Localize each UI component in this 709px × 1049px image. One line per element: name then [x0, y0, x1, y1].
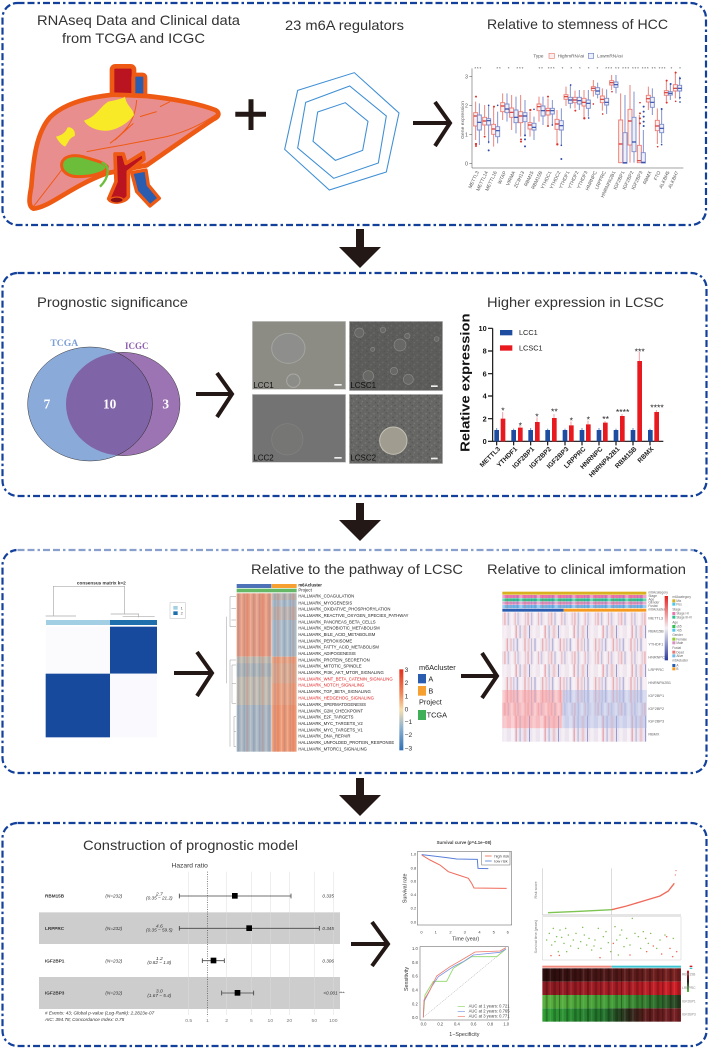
chart: survival curve: 0.4	[411, 892, 417, 897]
pathway labels: Project	[298, 587, 313, 592]
gene labels: ZC3H13	[513, 170, 526, 189]
heatmap: risk genes: IGF2BP1	[682, 999, 696, 1003]
gene labels: HNRNPC	[585, 170, 599, 192]
image: LCSC1	[349, 321, 443, 391]
chart: ROC curve: AUC at 3 years: 0.771	[469, 1014, 510, 1019]
gene labels: METTL14	[475, 170, 490, 192]
pathway labels: HALLMARK_WNT_BETA_CATENIN_SIGNALING	[298, 676, 393, 681]
image: LCSC2	[349, 394, 443, 464]
chart: gene expression boxplot: 1	[465, 132, 468, 138]
legend: Dead	[676, 650, 684, 654]
chart: ROC curve: 0.4	[454, 1021, 460, 1026]
chart: forest plot: IGF2BP1	[45, 958, 65, 963]
legend	[665, 595, 693, 671]
legend: Type	[533, 54, 544, 59]
chart: relative expression bars: 6	[483, 369, 487, 378]
image: LCC1	[252, 321, 346, 390]
rows	[179, 894, 319, 995]
legend: 2	[181, 611, 184, 616]
chart: forest plot: 0.345	[322, 926, 334, 931]
chart: consensus matrix	[46, 581, 185, 737]
gene labels	[468, 170, 681, 199]
legend: clusters: m6Acluster	[419, 663, 456, 672]
red boxes	[474, 72, 677, 163]
blue boxes	[477, 75, 682, 163]
heading: pathway: Relative to the pathway of LCSC	[251, 561, 463, 577]
colour scale	[399, 667, 413, 752]
pathway labels: HALLMARK_E2F_TARGETS	[298, 715, 354, 720]
heading: clinical: Relative to clinical imformation	[487, 561, 686, 577]
panel: prognostic model	[2, 823, 706, 1046]
chart: relative expression bars: *	[587, 414, 591, 424]
chart: gene expression boxplot: 3	[465, 75, 468, 81]
gene labels: HNRNPA2B1	[600, 170, 618, 199]
gene labels: METTL16	[484, 170, 499, 192]
chart: survival curve: 2	[449, 929, 452, 934]
legend: Stage	[672, 608, 681, 612]
legend: 1	[181, 605, 184, 610]
pathway labels: HALLMARK_SPERMATOGENESIS	[298, 702, 366, 707]
venn diagram: ICGC	[125, 341, 148, 351]
gene labels: m6Acategory	[648, 591, 668, 595]
chart: relative expression bars: ***	[635, 346, 645, 356]
icon: nested hexagons	[285, 73, 399, 190]
pathway labels: HALLMARK_XENOBIOTIC_METABOLISM	[298, 626, 380, 631]
legend: A	[676, 664, 679, 668]
gene labels: RBM15	[523, 170, 536, 187]
chart: forest plot: # Events: 43; Global p-value (Log-Rank): 2.2823e-07	[45, 1010, 155, 1015]
chart: forest plot: (N=232)	[105, 926, 123, 931]
legend: Gender	[672, 633, 683, 637]
chart: survival curve: 3	[464, 929, 467, 934]
chart: ROC curve: 0.0	[412, 1015, 418, 1020]
chart: relative expression bars: IGF2BP3	[546, 446, 571, 470]
legend: >65	[676, 628, 682, 632]
heatmap: risk genes: LRPPRC	[682, 986, 696, 990]
panel: LCSC pathways	[2, 548, 706, 773]
gene labels: ALKBH7	[667, 170, 681, 190]
chart: survival curve: Survival rate	[403, 873, 409, 903]
chart: ROC curve: 1.0	[503, 1021, 510, 1026]
heading: RNAseq data: RNAseq Data and Clinical data	[37, 12, 240, 28]
chart: consensus matrix: consensus matrix k=2	[77, 581, 126, 586]
pathway labels: m6Acluster	[298, 583, 322, 588]
heatmap: risk genes: IGF2BP3	[682, 1013, 696, 1017]
chart: relative expression bars: **	[551, 407, 558, 417]
chart: ROC curve: 0.2	[437, 1021, 444, 1026]
chart: forest plot: (0.35 − 59.5)	[146, 928, 173, 933]
gene labels: WTAP	[497, 170, 508, 185]
arrow: to survival plots	[351, 922, 388, 966]
chart: forest plot: 0.335	[322, 894, 334, 899]
gene labels: IGF2BP2	[648, 707, 664, 711]
heading: model: Construction of prognostic model	[83, 837, 298, 853]
chart: relative expression bars: *	[535, 411, 539, 421]
pathway labels: HALLMARK_MYC_TARGETS_V2	[298, 721, 363, 726]
chart: survival curve: 1.0	[411, 851, 417, 856]
pathway labels: HALLMARK_COAGULATION	[298, 594, 354, 599]
outliers	[475, 72, 677, 147]
arrow: down 1	[339, 229, 381, 268]
legend: HighmRNAsi	[558, 54, 584, 59]
venn diagram	[28, 338, 180, 461]
chart: relative expression bars: *	[570, 416, 574, 426]
chart: survival status scatter	[534, 917, 681, 960]
pathway labels: HALLMARK_HEDGEHOG_SIGNALING	[298, 695, 374, 700]
chart: forest plot: (1.67 − 5.4)	[147, 993, 172, 998]
chart: forest plot: 100	[329, 1018, 338, 1024]
chart: forest plot: IGF2BP3	[45, 991, 65, 996]
legend: clusters: A	[428, 675, 433, 684]
pathway labels: HALLMARK_PROTEIN_SECRETION	[298, 658, 370, 663]
image: LCSC2: LCSC2	[350, 454, 377, 463]
pathway labels: HALLMARK_PI3K_AKT_MTOR_SIGNALING	[298, 670, 384, 675]
pathway labels: HALLMARK_ADIPOGENESIS	[298, 651, 356, 656]
chart: forest plot: (N=232)	[105, 991, 123, 996]
chart: relative expression bars: LRPPRC	[563, 446, 588, 470]
legend: m6Acluster	[672, 659, 688, 663]
legend: LowmRNAsi	[597, 54, 623, 59]
chart: relative expression bars: *	[519, 420, 523, 430]
chart: survival curve: 0.0	[411, 919, 417, 924]
chart: forest plot: (N=232)	[105, 894, 123, 899]
pathway labels: HALLMARK_PANCREAS_BETA_CELLS	[298, 619, 376, 624]
chart: survival curve: 0	[420, 929, 423, 934]
gene labels: Gender	[648, 601, 660, 605]
chart: risk score distribution	[534, 868, 681, 915]
arrow: to pathway heatmap	[174, 652, 212, 696]
chart: ROC curve: 0.0	[421, 1021, 427, 1026]
legend: clusters: B	[428, 686, 433, 695]
legend: ≤65	[676, 625, 682, 629]
pathway labels: HALLMARK_MYOGENESIS	[298, 600, 352, 605]
chart: ROC curve: 1.0	[412, 946, 418, 951]
chart: ROC curve: AUC at 2 years: 0.765	[469, 1009, 510, 1014]
legend: clusters: Project	[419, 697, 442, 706]
chart: survival curve: 0.6	[411, 878, 417, 883]
chart: forest plot: 3.0	[156, 988, 163, 994]
pathway labels: HALLMARK_PEROXISOME	[298, 638, 352, 643]
gene labels: YTHDF3	[576, 170, 590, 190]
pathway labels: HALLMARK_BILE_ACID_METABOLISM	[298, 632, 376, 637]
chart: survival curve: 1	[435, 929, 438, 934]
chart: gene expression boxplot	[460, 53, 683, 199]
gene labels: m6Acluster	[648, 608, 666, 612]
cell micrographs	[252, 321, 443, 464]
chart: forest plot: (N=232)	[105, 958, 123, 963]
heading: prognostic: Prognostic significance	[37, 294, 188, 310]
pathway labels: HALLMARK_OXIDATIVE_PHOSPHORYLATION	[298, 607, 390, 612]
legend: m6Acategory	[672, 595, 691, 599]
legend: clusters: TCGA	[427, 710, 447, 719]
legend: Male	[676, 641, 683, 645]
legend	[533, 53, 623, 59]
chart: survival curve: 5	[493, 929, 496, 934]
chart: forest plot: 5	[250, 1018, 253, 1024]
chart: forest plot: (0.35 − 21.2)	[146, 895, 173, 900]
chart: forest plot: AIC: 394.78; Concordance Index: 0.75	[44, 1017, 125, 1022]
gene labels: IGF2BP1	[613, 170, 627, 191]
chart: relative expression bars: RBM15B	[614, 446, 639, 470]
chart: relative expression bars: ****	[616, 407, 630, 417]
chart: forest plot: 50	[312, 1018, 317, 1024]
legend: B	[676, 667, 678, 671]
venn diagram: 7	[44, 397, 51, 412]
colour scale: −2	[405, 732, 413, 739]
gene labels: ALKBH5	[658, 170, 672, 190]
pathway labels: HALLMARK_REACTIVE_OXYGEN_SPECIES_PATHWAY	[298, 613, 409, 618]
gene labels: HNRNPC	[648, 655, 665, 659]
gene labels: IGF2BP2	[622, 170, 636, 191]
chart: relative expression bars: 10	[479, 324, 487, 333]
gene labels: Stage	[648, 594, 657, 598]
colour scale: 1	[405, 693, 409, 700]
venn diagram: 10	[103, 397, 117, 412]
pathway labels: HALLMARK_NOTCH_SIGNALING	[298, 683, 364, 688]
gene labels: RBM15B	[648, 629, 664, 633]
chart: forest plot: <0.001 ***	[323, 991, 345, 996]
chart: forest plot: (0.82 − 1.8)	[147, 960, 172, 965]
arrow: down 2	[339, 503, 381, 541]
chart: survival curve	[403, 840, 512, 942]
gene labels: RBMX	[642, 170, 654, 185]
gene labels: Age	[648, 597, 654, 601]
significance stars: *** ** * *** ** *** * * * * * *** ** *** *** *** ** *** * *	[474, 66, 681, 71]
legend: Alive	[676, 654, 683, 658]
chart: survival curve: 4	[478, 929, 481, 934]
chart: relative expression bars: IGF2BP1	[512, 446, 536, 470]
chart: ROC curve: Sensitivity	[404, 967, 410, 991]
chart: relative expression bars: Relative expression	[457, 313, 472, 452]
legend	[500, 328, 543, 352]
chart: relative expression bars: ****	[650, 403, 664, 413]
chart: ROC curve: 1−Specificity	[449, 1032, 480, 1038]
colour scale: 3	[405, 667, 409, 674]
legend: Age	[672, 620, 678, 624]
image: LCSC1: LCSC1	[350, 381, 377, 390]
legend: LCSC1	[519, 343, 543, 352]
gene labels: LRPPRC	[648, 668, 664, 672]
legend: clusters	[418, 663, 456, 720]
colour scale: −1	[405, 719, 413, 726]
chart: forest plot: Hazard ratio	[172, 863, 208, 870]
heading: stemness: Relative to stemness of HCC	[487, 16, 668, 32]
heatmap: hallmark pathways	[227, 583, 456, 752]
chart: relative expression bars: HNRNPA2B1	[588, 446, 622, 479]
gene labels: IGF2BP3	[631, 170, 645, 191]
chart: relative expression bars: **	[602, 414, 610, 424]
chart: relative expression bars: METTL3	[479, 446, 502, 469]
chart: survival curve: Time (year)	[452, 936, 479, 942]
pathway labels: HALLMARK_MYC_TARGETS_V1	[298, 727, 363, 732]
chart: gene expression boxplot: Gene expression	[460, 101, 466, 139]
chart: forest plot: RBM15B	[45, 894, 65, 899]
gene labels: YTHDC2	[549, 170, 563, 190]
chart: forest plot: 20	[287, 1018, 292, 1024]
legend: Stage I-II	[676, 612, 689, 616]
chart: forest plot: 1.2	[156, 956, 163, 962]
chart: risk score distribution: Risk score	[534, 881, 538, 899]
gene labels: RBM15B	[531, 170, 544, 190]
chart: survival curve: high risk	[494, 853, 509, 858]
gene labels: LRPPRC	[594, 170, 608, 191]
chart: relative expression bars: 2	[483, 414, 487, 423]
gene labels: YTHDF2	[567, 170, 581, 190]
chart: forest plot	[39, 863, 345, 1024]
colour scale: −3	[405, 745, 413, 752]
pathway labels: HALLMARK_TGF_BETA_SIGNALING	[298, 689, 371, 694]
venn diagram: TCGA	[50, 338, 78, 349]
chart: ROC curve: 0.4	[412, 988, 418, 993]
pathway labels: HALLMARK_UNFOLDED_PROTEIN_RESPONSE	[298, 740, 394, 745]
gene labels: YTHDF1	[558, 170, 572, 190]
colour scale: 2	[405, 680, 409, 687]
chart: forest plot: 4.6	[156, 924, 163, 930]
legend: Stage III-IV	[676, 615, 693, 619]
image: LCC2	[252, 394, 346, 463]
chart: forest plot: 1	[206, 1018, 209, 1024]
chart: relative expression bars	[457, 313, 664, 479]
chart: relative expression bars: 4	[483, 392, 488, 401]
gene labels: YTHDC1	[540, 170, 554, 190]
icon: plus	[235, 99, 266, 130]
chart: relative expression bars: 8	[483, 347, 487, 356]
chart: relative expression bars: *	[501, 405, 505, 415]
heatmap: risk genes	[542, 966, 696, 1022]
chart: forest plot: 0.306	[322, 958, 334, 963]
chart: ROC curve: 0.6	[412, 973, 418, 978]
legend: Pos	[676, 602, 682, 606]
chart: relative expression bars: YTHDF1	[496, 446, 519, 469]
chart: relative expression bars: RBMX	[637, 445, 656, 465]
gene labels	[648, 591, 671, 737]
legend: LCC1	[519, 328, 538, 337]
chart: ROC curve: 0.8	[487, 1021, 494, 1026]
pathway labels: HALLMARK_MITOTIC_SPINDLE	[298, 664, 362, 669]
chart: gene expression boxplot: 2	[465, 104, 468, 110]
heatmap: risk genes: RBM15B	[682, 973, 696, 977]
chart: relative expression bars: 0	[483, 437, 487, 446]
arrow: to clinical heatmap	[461, 653, 497, 698]
chart: survival curve: 6	[507, 929, 510, 934]
pathway labels	[298, 583, 409, 751]
chart: forest plot: LRPPRC	[45, 926, 65, 931]
image: LCC2: LCC2	[253, 454, 274, 463]
legend: Female	[676, 637, 687, 641]
gene labels: VIRMA	[505, 170, 517, 187]
venn diagram: 3	[162, 397, 169, 412]
heading: RNAseq data: from TCGA and ICGC	[62, 30, 205, 46]
legend: Fustat	[672, 646, 681, 650]
pathway labels: HALLMARK_DNA_REPAIR	[298, 734, 350, 739]
pathway labels: HALLMARK_G2M_CHECKPOINT	[298, 708, 363, 713]
pathway labels: HALLMARK_MTORC1_SIGNALING	[298, 746, 367, 751]
panel: data sources	[2, 3, 706, 225]
arrow: to cell images	[196, 373, 232, 417]
gene labels: METTL3	[648, 616, 663, 620]
legend: Mix	[676, 599, 682, 603]
chart: forest plot: 2.7	[155, 891, 163, 897]
image: LCC1: LCC1	[253, 381, 274, 390]
chart: forest plot: 2	[225, 1018, 228, 1024]
gene labels: YTHDF1	[648, 642, 663, 646]
panel: prognostic significance	[2, 273, 706, 496]
legend	[170, 603, 185, 618]
chart: relative expression bars: HNRNPC	[579, 446, 605, 471]
chart: survival curve: 0.2	[411, 906, 417, 911]
gene labels: Fustat	[648, 604, 658, 608]
chart: ROC curve: 0.6	[471, 1021, 477, 1026]
chart: forest plot: 10	[268, 1018, 273, 1024]
pathway labels: HALLMARK_FATTY_ACID_METABOLISM	[298, 645, 379, 650]
chart: relative expression bars: IGF2BP2	[529, 446, 553, 470]
heatmap: clinical information	[502, 591, 693, 742]
arrow: to stemness	[413, 102, 450, 146]
gene labels: IGF2BP3	[648, 720, 664, 724]
chart: survival curve: Survival curve (p=4.1e−08)	[437, 840, 492, 845]
gene labels: RBMX	[648, 733, 660, 737]
gene labels: IGF2BP1	[648, 694, 664, 698]
chart: survival status scatter: Survival time (years)	[534, 920, 538, 953]
gene labels: FTO	[653, 170, 663, 182]
gene labels: METTL3	[468, 170, 481, 190]
chart: ROC curve: 0.2	[412, 1001, 418, 1006]
chart: survival curve: low risk	[494, 858, 508, 863]
arrow: down 3	[339, 778, 381, 816]
chart: gene expression boxplot: 0	[465, 161, 468, 167]
heading: RNAseq data	[37, 12, 240, 46]
chart: ROC curve: 0.8	[412, 960, 418, 965]
gene labels: HNRNPA2B1	[648, 681, 671, 685]
colour scale: 0	[405, 706, 409, 713]
chart: ROC curve	[404, 946, 510, 1038]
heading: 23 m6A regulators: 23 m6A regulators	[285, 17, 404, 33]
icon: liver	[30, 66, 218, 209]
heading: higher expression: Higher expression in LCSC	[487, 294, 664, 310]
chart: ROC curve: AUC at 1 years: 0.721	[469, 1004, 510, 1009]
chart: survival curve: 0.8	[411, 865, 417, 870]
chart: forest plot: 0.5	[185, 1018, 192, 1024]
